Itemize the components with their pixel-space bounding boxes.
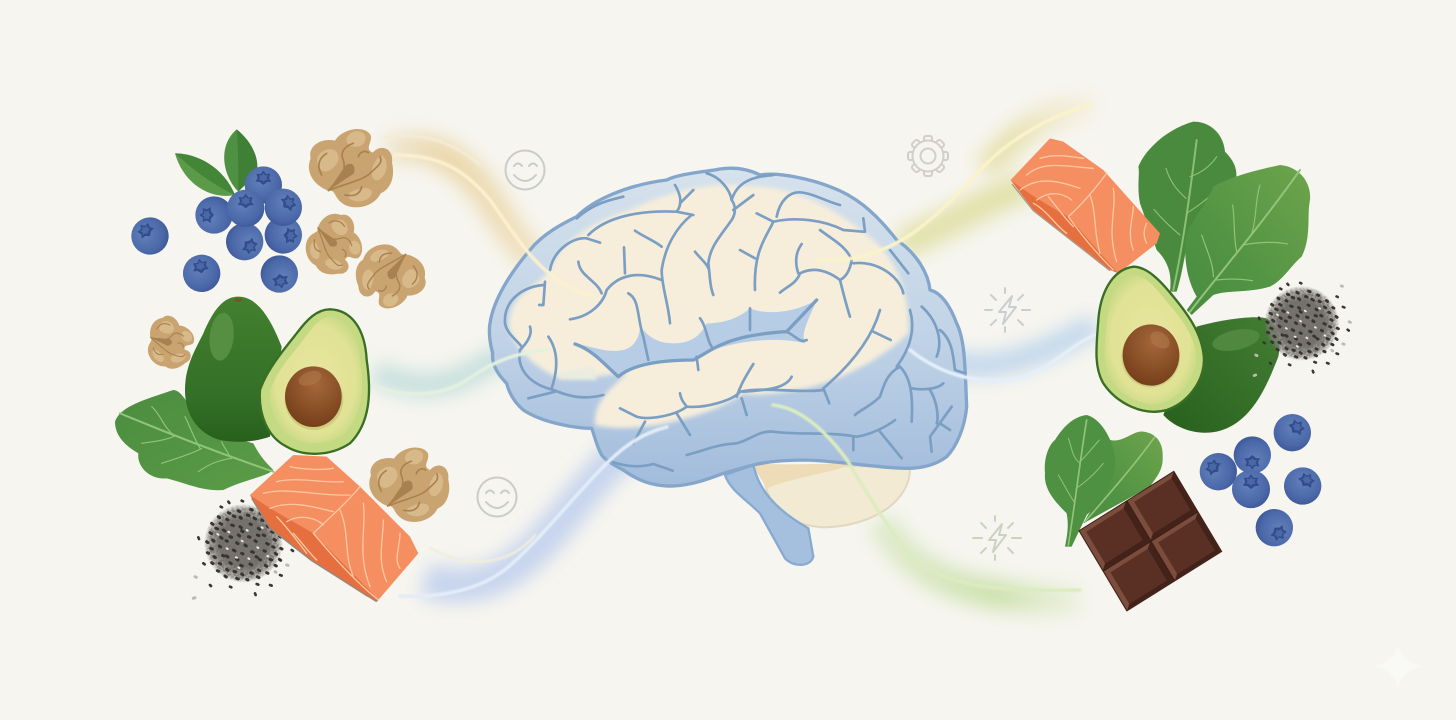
right food cluster bbox=[1011, 122, 1350, 612]
flowing ribbon lines bbox=[372, 105, 1095, 596]
blueberries bbox=[124, 166, 310, 296]
line: top right bbox=[817, 105, 1090, 260]
ribbon band: top right upper bbox=[985, 105, 1095, 170]
brain bbox=[489, 168, 967, 565]
icon: smiley top bbox=[506, 150, 544, 190]
left food cluster bbox=[115, 129, 449, 602]
brainstem bbox=[725, 465, 813, 565]
line: lower left bbox=[400, 427, 667, 596]
cerebrum outline bbox=[489, 168, 967, 486]
flowing ribbons behind brain bbox=[375, 105, 1095, 600]
icon: lightning bolt lower bbox=[973, 516, 1021, 560]
ribbon band: lower right bbox=[880, 520, 1080, 600]
line: lower left second bbox=[430, 535, 535, 562]
line: middle right bbox=[910, 335, 1095, 381]
line: middle left bbox=[372, 350, 548, 394]
cerebellum bbox=[753, 463, 910, 527]
whole avocado bbox=[185, 297, 282, 442]
spinach leaf front bbox=[1185, 165, 1310, 315]
cream lobes bbox=[509, 185, 909, 428]
chia seeds bbox=[193, 501, 295, 598]
sparkle watermark bbox=[1374, 645, 1422, 688]
chia seeds bbox=[1254, 283, 1350, 376]
line: top left upper bbox=[385, 136, 480, 165]
ribbon band: middle right bbox=[930, 325, 1095, 366]
dark chocolate bbox=[1078, 471, 1222, 612]
blueberry leaves bbox=[175, 129, 257, 196]
icon: lightning bolt upper bbox=[985, 288, 1030, 332]
whole avocado bbox=[1163, 317, 1279, 433]
spinach leaf bbox=[115, 390, 273, 490]
blueberries bbox=[1192, 406, 1329, 554]
salmon fillet bbox=[250, 455, 418, 602]
line: lower right bbox=[773, 405, 1080, 590]
line: top left bbox=[395, 155, 593, 296]
ribbon band: top left bbox=[385, 148, 590, 295]
ribbon band: top right bbox=[900, 185, 1030, 245]
walnut lower bbox=[369, 448, 449, 522]
walnuts top bbox=[306, 129, 430, 313]
halved avocado bbox=[1096, 267, 1204, 412]
cerebrum base bbox=[489, 168, 967, 486]
walnut small bbox=[135, 308, 204, 377]
ribbon band: lower left bbox=[425, 430, 650, 585]
icon: smiley bottom bbox=[478, 478, 516, 516]
sulci lines bbox=[505, 173, 965, 471]
spinach leaf back bbox=[1138, 122, 1236, 292]
salmon fillet bbox=[1011, 138, 1160, 273]
ribbon band: middle left bbox=[375, 350, 550, 385]
small spinach leaves bbox=[1045, 415, 1163, 547]
icon: gear bbox=[908, 136, 948, 176]
halved avocado bbox=[260, 309, 369, 454]
